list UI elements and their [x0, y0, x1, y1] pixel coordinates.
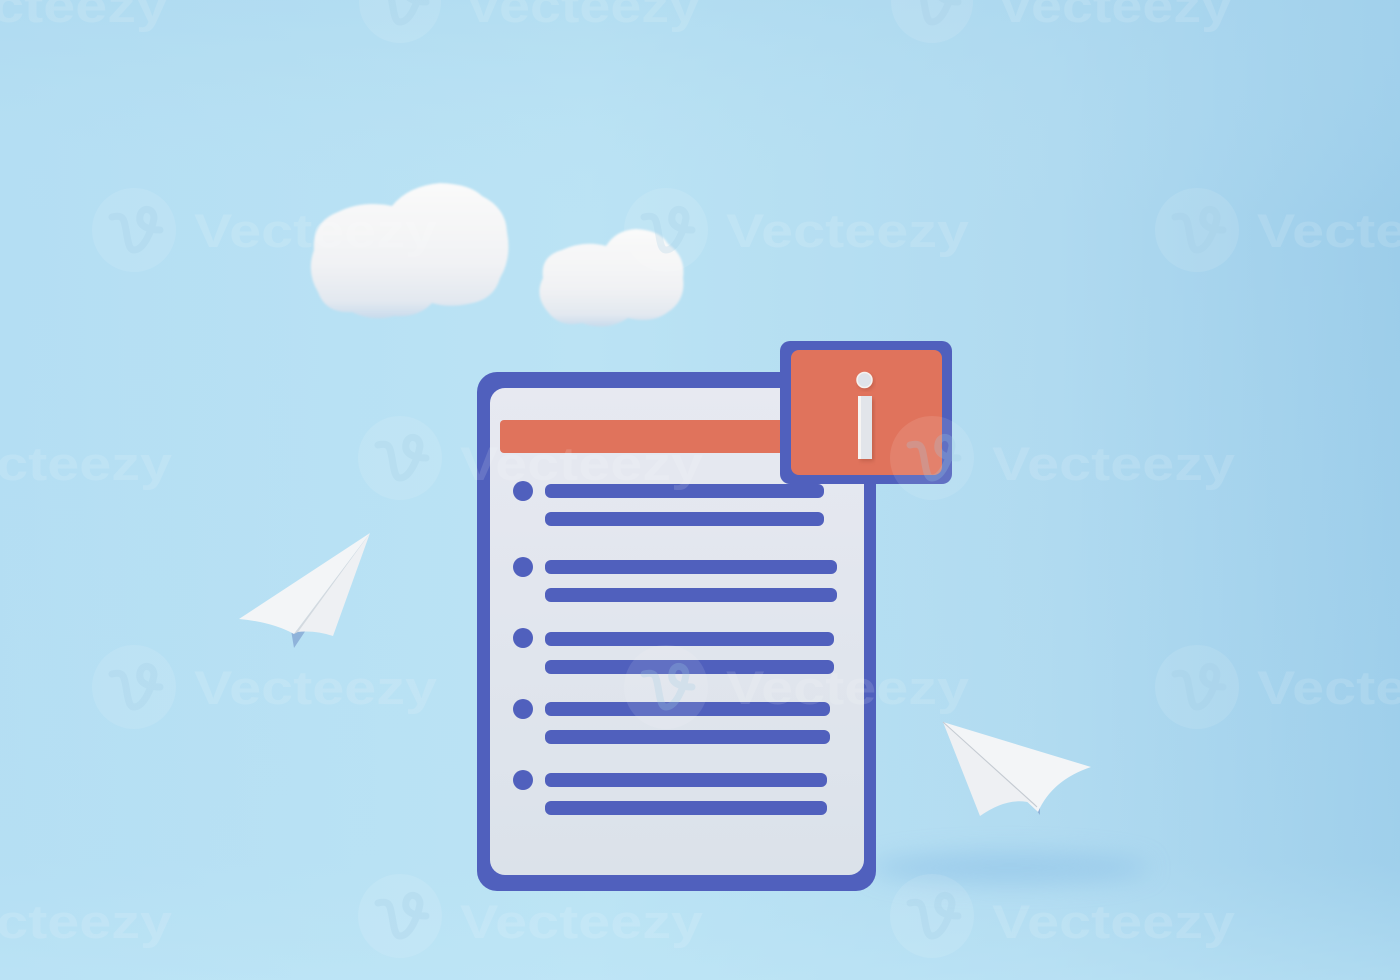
- watermark row 4: Vecteezy: [726, 661, 969, 714]
- header bar: [500, 420, 800, 453]
- document: [477, 372, 876, 891]
- watermark row 1: [0, 0, 1232, 43]
- paper plane right: [943, 722, 1091, 816]
- small cloud: [539, 229, 683, 327]
- watermark row 2: Vecteezy: [194, 204, 437, 257]
- watermark row 5: [0, 874, 1235, 958]
- document page: [490, 388, 864, 875]
- watermark row 5: Vecteezy: [460, 895, 703, 948]
- watermark row 5: Vecteezy: [992, 895, 1235, 948]
- watermark row 3: Vecteezy: [460, 437, 703, 490]
- watermark row 4: [92, 645, 1400, 729]
- watermark row 3: Vecteezy: [992, 437, 1235, 490]
- list row 4: [513, 699, 830, 744]
- floor shadow: [870, 852, 1150, 884]
- paper plane left: [239, 533, 370, 648]
- watermark row 4: Vecteezy: [194, 661, 437, 714]
- list row 3: [513, 628, 834, 674]
- watermark row 3: [0, 416, 1235, 500]
- icon: letter i: [857, 372, 874, 461]
- watermark row 2: [92, 188, 1400, 272]
- info badge: [780, 341, 952, 484]
- watermark row 2: Vecteezy: [726, 204, 969, 257]
- list row 5: [513, 770, 827, 815]
- list row 1: [513, 481, 824, 526]
- document frame: [477, 372, 876, 891]
- list row 2: [513, 557, 837, 602]
- large cloud: [311, 183, 508, 318]
